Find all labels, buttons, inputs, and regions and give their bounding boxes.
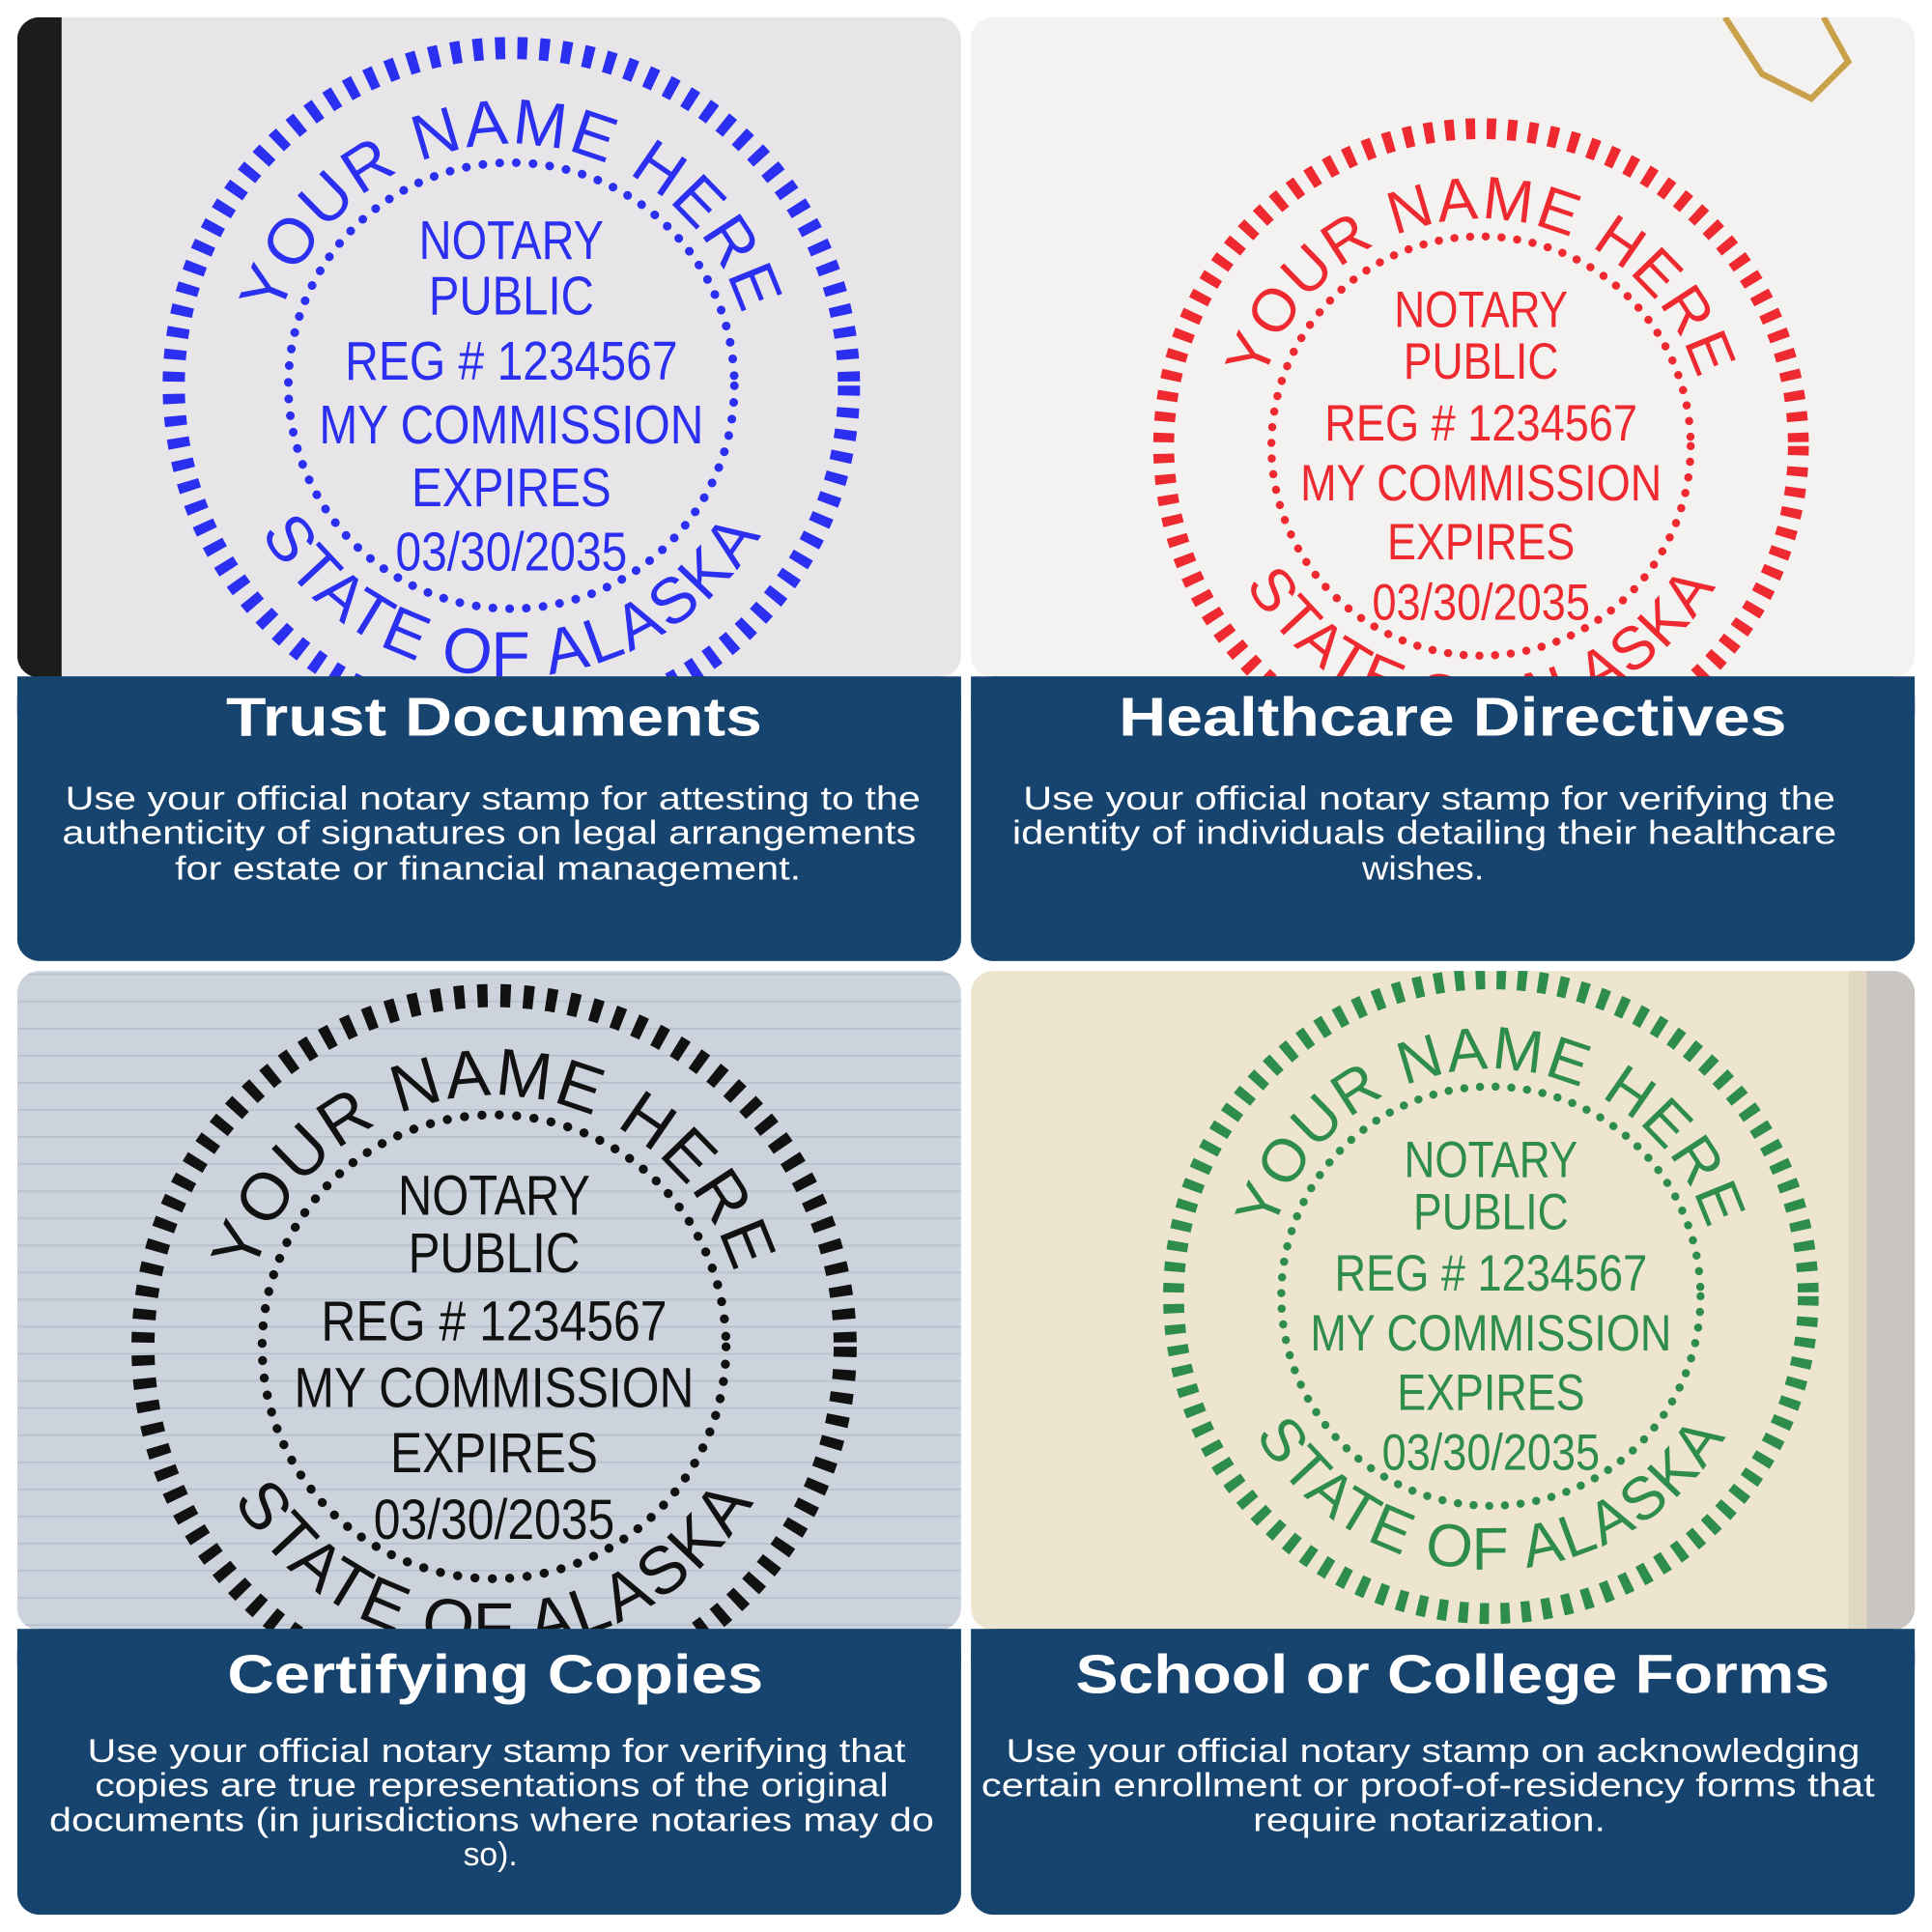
text: certifying description (49, 1733, 934, 1873)
text: healthcare description: wishes. (1361, 851, 1484, 888)
text: certifying description: so). (464, 1836, 518, 1873)
text: school description (981, 1733, 1875, 1838)
text: healthcare description: identity of individuals detailing their healthcare (1012, 815, 1836, 852)
text: healthcare description (1012, 781, 1836, 888)
photo: green stamp (971, 971, 1916, 1631)
text: trust documents description: Use your official notary stamp for attesting to the (66, 781, 921, 817)
text: school description: certain enrollment or proof-of-residency forms that (981, 1768, 1875, 1804)
panel: school or college forms (971, 971, 1916, 1915)
text: healthcare description: Use your official notary stamp for verifying the (1023, 781, 1835, 817)
panel: healthcare directives (971, 17, 1915, 961)
heading: certifying copies: Certifying Copies (227, 1644, 763, 1705)
heading: healthcare directives: Healthcare Directives (1119, 686, 1786, 747)
text: trust documents description (62, 781, 921, 888)
text: certifying description: Use your official notary stamp for verifying that (88, 1733, 906, 1770)
text: trust documents description: authenticity of signatures on legal arrangements (62, 815, 916, 852)
text: school description: Use your official notary stamp on acknowledging (1006, 1733, 1860, 1770)
panel: trust documents (17, 17, 961, 961)
photo: black stamp (17, 971, 961, 1698)
text: trust documents description: for estate or financial management. (175, 851, 801, 888)
photo: blue stamp (17, 17, 961, 724)
text: school description: require notarization. (1253, 1802, 1605, 1838)
text: certifying description: documents (in jurisdictions where notaries may do (49, 1802, 934, 1838)
text: certifying description: copies are true representations of the original (95, 1768, 889, 1804)
heading: trust documents: Trust Documents (226, 686, 762, 747)
heading: school or college forms: School or College Forms (1076, 1644, 1830, 1705)
panel: certifying copies (17, 971, 961, 1915)
photo: red stamp (971, 17, 1915, 676)
